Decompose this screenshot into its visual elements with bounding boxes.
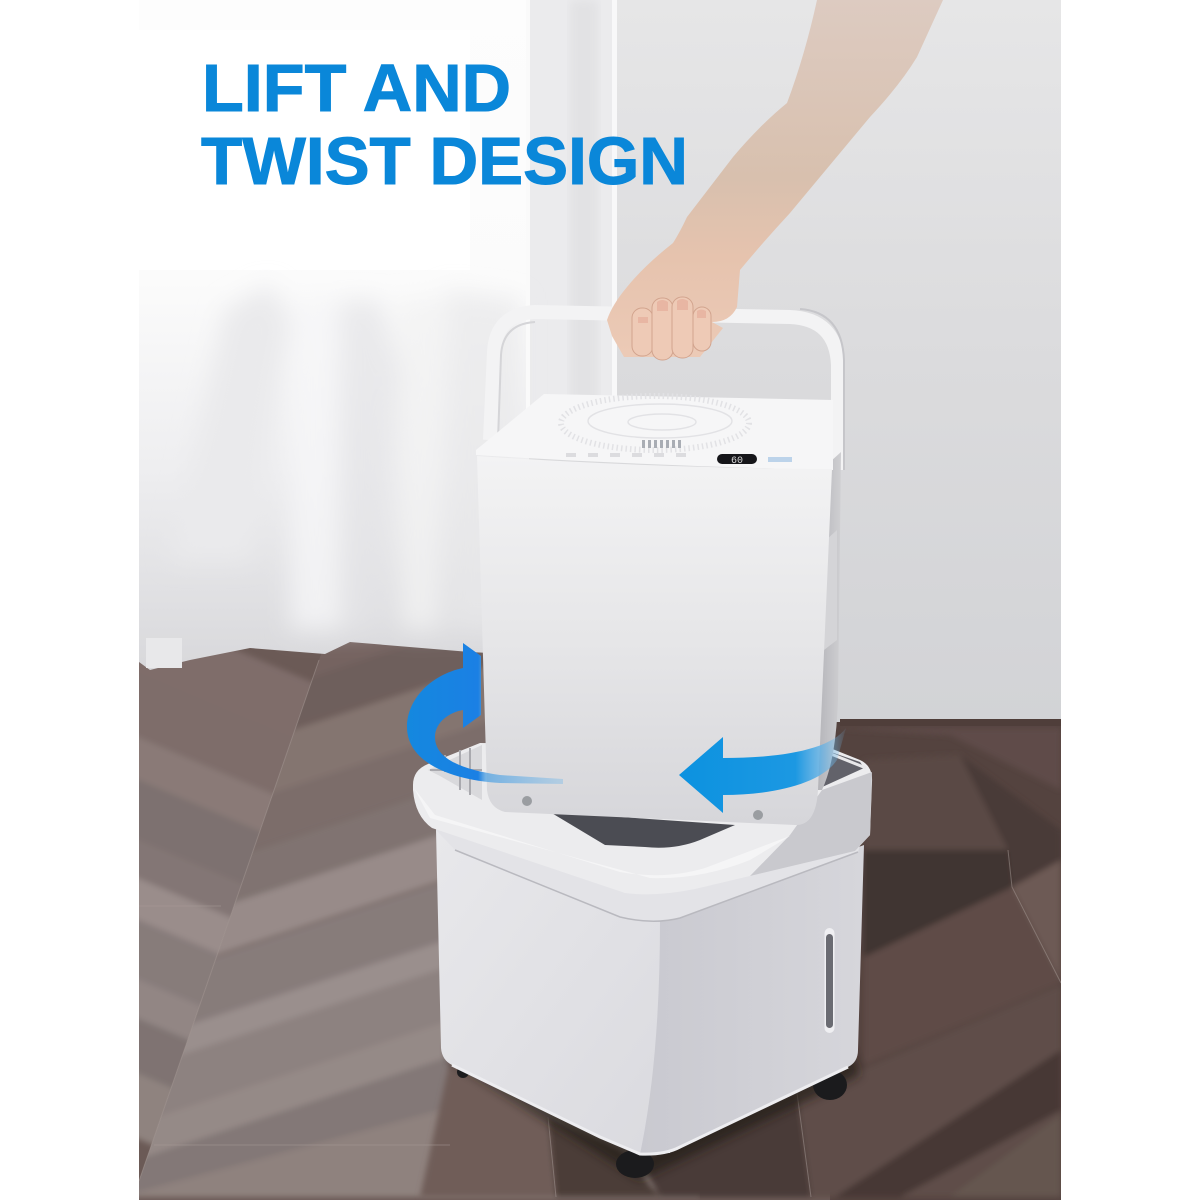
screws	[522, 796, 532, 806]
wall skirting	[840, 719, 1061, 722]
title	[201, 51, 688, 199]
tank right face	[640, 845, 864, 1154]
arrow: right rotation	[679, 728, 846, 813]
inner mesh right	[824, 752, 863, 786]
digital display: 60	[731, 456, 743, 467]
title: LIFT AND	[202, 51, 511, 126]
floor right chevrons	[139, 642, 698, 1199]
wall panel between curtain and column	[530, 74, 612, 406]
arrow: left curved rotation	[407, 643, 563, 784]
fingernails	[638, 299, 706, 323]
digital display	[717, 454, 757, 464]
rim lower bright band	[414, 788, 790, 878]
top panel	[476, 394, 833, 470]
control buttons	[566, 453, 695, 457]
tank left face	[436, 830, 670, 1153]
front face	[477, 456, 832, 825]
side mesh strip	[818, 452, 841, 790]
infographic scene	[139, 0, 1061, 1200]
title: TWIST DESIGN	[201, 124, 688, 199]
floor central and right boards	[420, 728, 1061, 1197]
base water tank	[413, 743, 872, 1154]
fingers	[632, 297, 711, 360]
floor	[139, 642, 1061, 1200]
blue label	[768, 457, 792, 462]
lifted dehumidifier	[476, 394, 841, 825]
tank shadow	[450, 1040, 860, 1180]
wall	[525, 0, 1061, 722]
curtain	[139, 0, 530, 670]
vent slots	[642, 440, 684, 448]
handle	[490, 309, 844, 470]
water level window	[824, 928, 834, 1033]
casters	[457, 1066, 847, 1178]
floor seams	[139, 660, 1061, 1197]
vent grille	[561, 396, 749, 450]
inner mesh left	[428, 745, 482, 800]
tank collar	[436, 829, 860, 920]
rim right shaded part	[750, 772, 872, 876]
hand and arm	[607, 0, 943, 360]
floor left chevrons	[139, 650, 311, 1146]
tank rim	[413, 743, 872, 894]
inner dark opening	[550, 812, 735, 848]
